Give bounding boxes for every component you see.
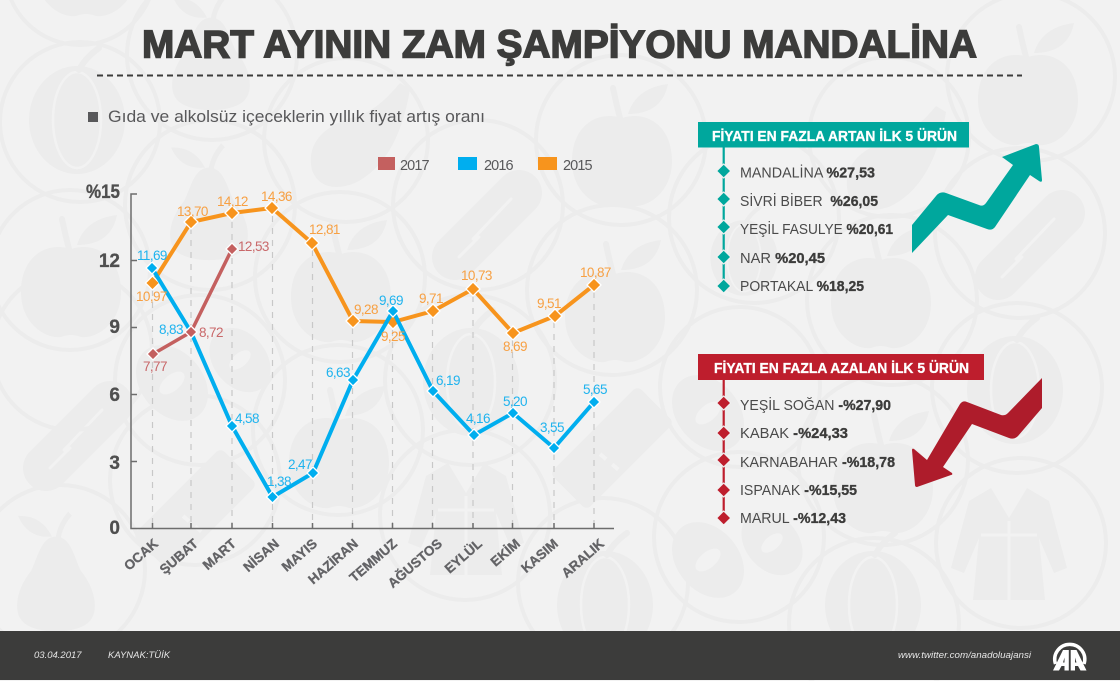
- value labels 2016: 1,38: [267, 474, 291, 489]
- value labels 2015: [136, 189, 611, 354]
- heading: FİYATI EN FAZLA ARTAN İLK 5 ÜRÜN: [712, 128, 957, 145]
- footer bar: [0, 631, 1120, 680]
- y axis labels: 0: [109, 518, 120, 539]
- y axis labels: %15: [86, 182, 120, 203]
- value labels 2015: 9,51: [537, 296, 561, 311]
- legend: 2015: [563, 158, 592, 174]
- drop lines: [152, 216, 594, 528]
- value labels 2016: 8,83: [159, 322, 183, 337]
- title: MART AYININ ZAM ŞAMPİYONU MANDALİNA: [142, 24, 977, 66]
- value labels 2015: 8,69: [503, 339, 527, 354]
- line chart: [86, 182, 614, 591]
- value labels 2016: 2,47: [288, 457, 312, 472]
- value labels 2015: 9,28: [354, 302, 378, 317]
- y axis labels: 9: [109, 317, 120, 338]
- y axis labels: 3: [109, 453, 120, 474]
- value labels 2016: 5,65: [583, 382, 607, 397]
- series 2015: [146, 201, 601, 340]
- chart subtitle: Gıda ve alkolsüz içeceklerin yıllık fiyat artış oranı: [108, 107, 485, 126]
- value labels 2017: 7,77: [143, 359, 167, 374]
- list of decreases: KABAK -%24,33: [740, 425, 848, 442]
- axes: [131, 194, 614, 528]
- panel: top 5 decreases: [698, 354, 1042, 527]
- value labels 2015: 12,81: [309, 222, 340, 237]
- icon: agency logo: [1053, 644, 1086, 670]
- y axis labels: [86, 182, 120, 539]
- value labels 2016: 5,20: [503, 394, 527, 409]
- series 2017: [147, 243, 238, 360]
- value labels 2015: 9,71: [419, 291, 443, 306]
- list of increases: [740, 164, 893, 295]
- list of increases: NAR %20,45: [740, 250, 825, 267]
- x axis month labels: KASIM: [518, 536, 561, 576]
- list of decreases: KARNABAHAR -%18,78: [740, 454, 895, 471]
- value labels 2016: 9,69: [379, 293, 403, 308]
- y axis labels: 6: [109, 385, 120, 406]
- heading: FİYATI EN FAZLA AZALAN İLK 5 ÜRÜN: [714, 360, 969, 377]
- heading: [698, 122, 969, 148]
- x axis month labels: NİSAN: [240, 536, 282, 575]
- legend: 2016: [484, 158, 513, 174]
- value labels 2016: 4,58: [235, 411, 259, 426]
- list of decreases: MARUL -%12,43: [740, 510, 846, 527]
- date: 03.04.2017: [34, 650, 82, 661]
- value labels 2016: 11,69: [137, 248, 167, 263]
- value labels 2016: 4,16: [466, 411, 490, 426]
- series 2016: [146, 262, 600, 503]
- value labels 2015: 9,25: [381, 329, 405, 344]
- value labels 2017: 8,72: [199, 325, 223, 340]
- value labels 2015: 10,97: [136, 289, 167, 304]
- legend: 2017: [400, 158, 429, 174]
- list of increases: YEŞİL FASULYE %20,61: [740, 220, 893, 238]
- list of decreases: [740, 396, 895, 527]
- list of increases: MANDALİNA %27,53: [740, 164, 875, 182]
- x axis month labels: TEMMUZ: [347, 536, 400, 585]
- list of decreases: YEŞİL SOĞAN -%27,90: [740, 396, 891, 414]
- value labels 2015: 14,36: [261, 189, 292, 204]
- source: KAYNAK:TÜİK: [108, 650, 171, 661]
- x axis month labels: EKİM: [488, 536, 523, 569]
- icon: rising arrow: [912, 144, 1042, 253]
- x axis month labels: HAZİRAN: [305, 536, 361, 587]
- value labels 2016: [137, 248, 607, 489]
- icon: falling arrow: [912, 378, 1042, 487]
- value labels 2015: 10,87: [580, 265, 611, 280]
- x axis month labels: ARALIK: [559, 536, 607, 581]
- value labels 2017: 12,53: [238, 239, 269, 254]
- x axis month labels: MART: [200, 535, 240, 573]
- panel: top 5 increases: [698, 122, 1042, 295]
- x axis month labels: MAYIS: [279, 536, 320, 575]
- value labels 2015: 14,12: [217, 194, 248, 209]
- heading: [698, 354, 984, 380]
- value labels 2016: 6,63: [326, 365, 350, 380]
- legend: [378, 157, 592, 174]
- list of increases: PORTAKAL %18,25: [740, 278, 864, 295]
- x axis month labels: OCAK: [121, 536, 161, 573]
- social link: www.twitter.com/anadoluajansi: [898, 650, 1032, 661]
- value labels 2016: 6,19: [436, 373, 460, 388]
- value labels 2015: 10,73: [461, 268, 492, 283]
- value labels 2017: [143, 239, 269, 374]
- x axis month labels: AĞUSTOS: [385, 536, 445, 591]
- list of decreases: ISPANAK -%15,55: [740, 482, 857, 499]
- x axis month labels: [121, 535, 607, 591]
- value labels 2015: 13,70: [177, 204, 208, 219]
- x axis month labels: ŞUBAT: [157, 535, 202, 577]
- list of increases: SİVRİ BİBER %26,05: [740, 192, 878, 210]
- y axis labels: 12: [99, 251, 120, 272]
- value labels 2016: 3,55: [540, 420, 564, 435]
- x axis month labels: EYLÜL: [442, 536, 485, 576]
